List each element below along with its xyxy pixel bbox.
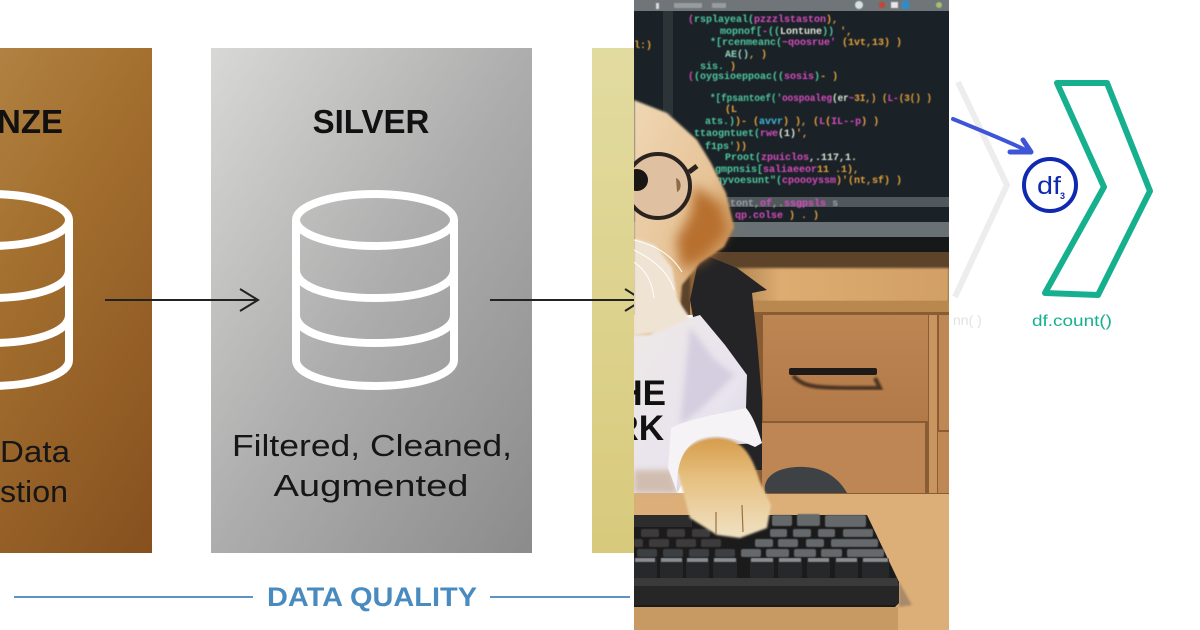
drawer handle <box>789 368 880 388</box>
panel: df.count() sketch <box>953 82 1150 330</box>
code lines: qyvoesunt"(cpoooyssm)'(nt,sf) ) <box>716 175 902 187</box>
code lines: *[fpsantoef('oospoaleg(er~3I,) (L-(3() ) <box>710 93 932 105</box>
arrow: bronze to silver <box>105 289 258 311</box>
label: data quality: DATA QUALITY <box>267 582 477 612</box>
code lines: *[rcenmeanc(~qoosrue' (1vt,13) ) <box>710 37 902 49</box>
shirt print: RK <box>613 409 664 448</box>
shirt print <box>634 380 665 440</box>
desk surface <box>634 493 949 630</box>
icon: df3 circle <box>1024 159 1076 211</box>
icon: silver database <box>296 194 454 386</box>
right drawers <box>939 315 949 430</box>
orange fur <box>676 185 728 270</box>
panel: bronze <box>0 48 152 553</box>
code lines: sis. ) <box>700 61 736 73</box>
shirt print: HE <box>617 374 666 413</box>
code lines: ats.))- (avvr) ), (L(IL--p) ) <box>705 116 879 128</box>
code lines: (rsplayeal(pzzzlstaston), <box>688 14 838 26</box>
code lines: tont,of,.ssgpsls s <box>730 198 838 210</box>
faded label: nn( ) <box>953 312 982 328</box>
keys <box>634 514 884 557</box>
text: silver description <box>234 434 509 502</box>
whiskers <box>634 240 682 298</box>
window icons <box>656 1 942 9</box>
text: bronze description <box>1 441 70 502</box>
heading: silver: SILVER <box>313 103 430 140</box>
label: df.count(): df.count() <box>1032 313 1112 330</box>
key tops <box>635 558 888 562</box>
head fur <box>634 100 734 335</box>
code lines: qp.colse ) . ) <box>735 210 819 222</box>
front key row <box>634 558 889 578</box>
drawers <box>750 312 949 494</box>
faded chevron <box>953 82 1007 328</box>
desk behind the monitor <box>634 252 949 315</box>
arrow: to df3 <box>953 119 1031 152</box>
muzzle <box>634 238 690 335</box>
code lines: mopnof[-((Lontune)) ', <box>720 26 852 38</box>
chevron: count <box>1045 83 1150 295</box>
code lines: f1ps')) <box>705 141 747 153</box>
icon: df3 circle: 3 <box>1060 191 1065 201</box>
code lines <box>634 14 932 222</box>
t-shirt <box>634 315 762 494</box>
desk shadow under keyboard <box>634 582 912 630</box>
shirt cuff <box>668 408 762 492</box>
code lines: ((oygsioeppoac((sosis)- ) <box>688 71 838 83</box>
keyboard <box>634 514 899 607</box>
panel: dog coding photo <box>613 0 949 630</box>
icon: df3 circle: df <box>1037 172 1061 200</box>
panel: silver <box>211 48 532 553</box>
monitor <box>634 0 949 252</box>
text: silver description: Augmented <box>274 468 468 503</box>
dog <box>634 98 772 540</box>
mouse on desk <box>765 467 847 493</box>
panel: medallion data quality diagram <box>0 48 642 612</box>
code lines: Proot(zpuiclos,.117,1. <box>725 152 857 164</box>
arrow: silver to gold <box>490 289 636 311</box>
code lines: gmpnsis[saliaeeor11 .1), <box>715 164 859 176</box>
chair <box>690 253 767 470</box>
code lines: AE(), ) <box>725 49 767 61</box>
paw <box>676 438 771 538</box>
code lines: (L <box>725 104 737 116</box>
lower drawer <box>762 423 925 493</box>
upper drawer <box>763 315 928 421</box>
side strip <box>929 315 937 493</box>
code lines: ttaogntuet(rwe(1)', <box>694 128 808 140</box>
glasses <box>626 154 697 218</box>
text: bronze description: stion <box>0 474 68 509</box>
text: silver description: Filtered, Cleaned, <box>232 428 512 463</box>
panel: gold <box>592 48 634 553</box>
text: bronze description: Data <box>0 434 71 469</box>
code lines: l:) <box>634 40 652 52</box>
icon: bronze database <box>0 194 69 386</box>
